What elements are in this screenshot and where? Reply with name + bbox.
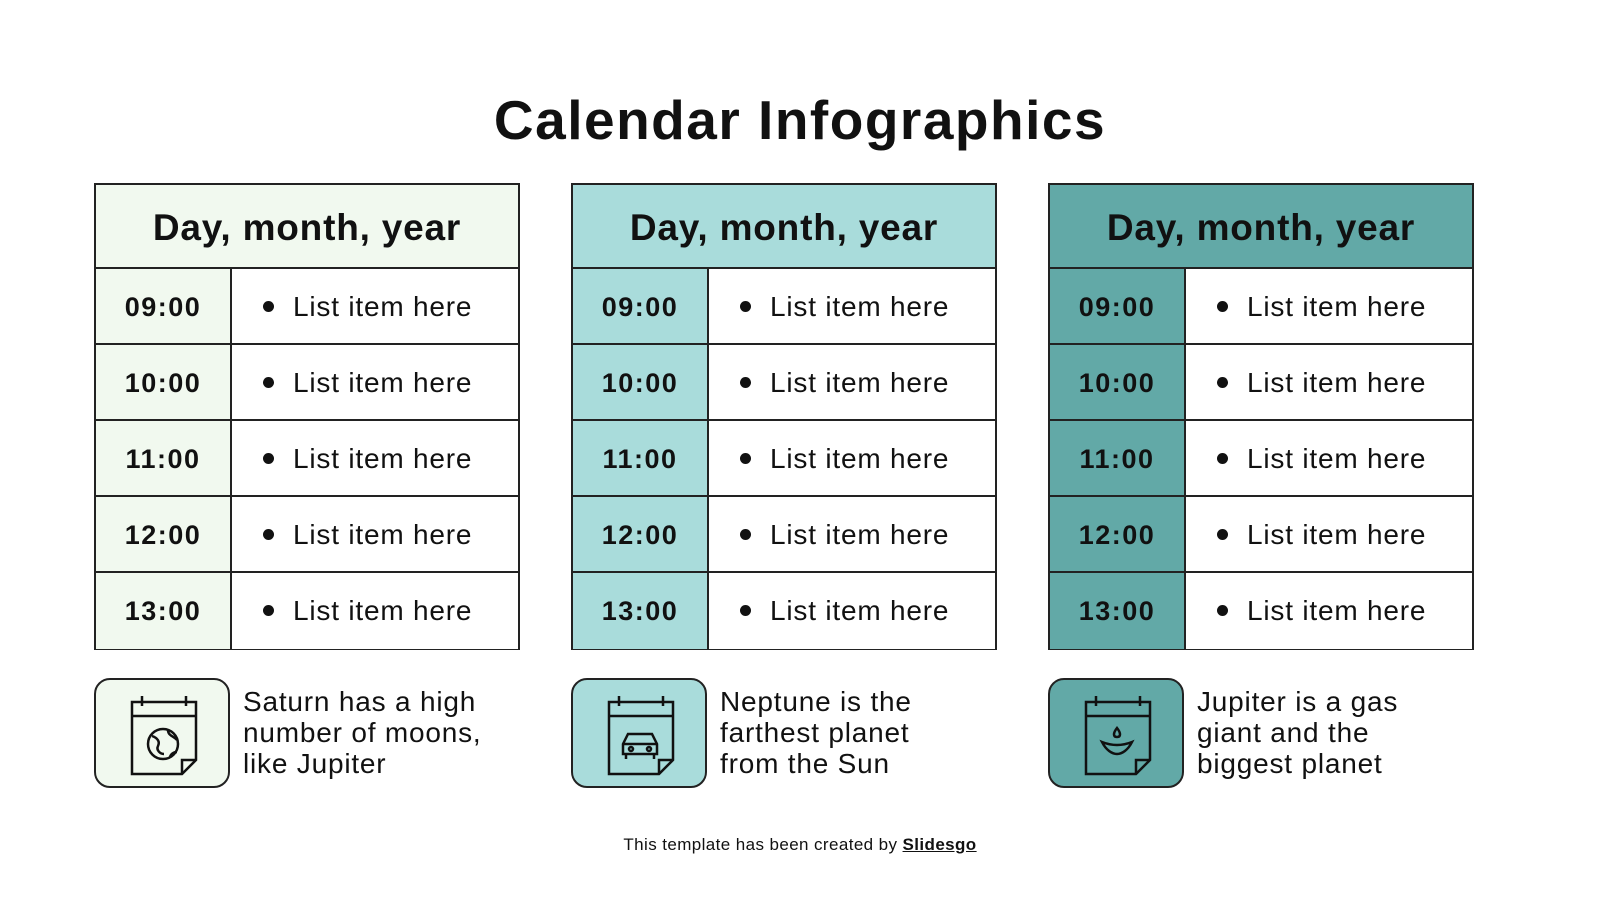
table header 2: Day, month, year [630,207,938,248]
text 3 [1197,686,1398,779]
panel: table 2: List item here [770,443,949,474]
panel: table 1: 09:00 [125,292,201,322]
panel: table 1: 13:00 [125,596,201,626]
panel: table 3: List item here [1247,367,1426,398]
text 1: like Jupiter [243,748,386,779]
panel: table 1: 12:00 [125,520,201,550]
icon: calendar globe [94,678,230,788]
panel: table 2: 12:00 [602,520,678,550]
panel: table 3: List item here [1247,443,1426,474]
text 3: biggest planet [1197,748,1383,779]
panel: table 2: 10:00 [602,368,678,398]
text 1 [243,686,481,779]
panel: table 1: List item here [293,595,472,626]
panel: table 3: 09:00 [1079,292,1155,322]
text 1: Saturn has a high [243,686,476,717]
panel: table 1: List item here [293,291,472,322]
footer credit: This template has been created by Slidesgo [623,835,977,854]
icon: calendar lamp [1048,678,1184,788]
panel: table 1: 10:00 [125,368,201,398]
table header 1 [96,185,518,269]
panel: table 2: List item here [770,595,949,626]
panel: table 2: List item here [770,519,949,550]
panel: table 2: 11:00 [602,444,678,474]
panel: table 2: List item here [770,291,949,322]
panel: table 2: 13:00 [602,596,678,626]
table header 2 [573,185,995,269]
panel: table 1: List item here [293,367,472,398]
panel: table 3: List item here [1247,291,1426,322]
text 1: number of moons, [243,717,481,748]
panel: table 3: 13:00 [1079,596,1155,626]
text 2 [720,686,912,779]
table header 3 [1050,185,1472,269]
panel: table 3: 12:00 [1079,520,1155,550]
panel: table 3: List item here [1247,595,1426,626]
table header 1: Day, month, year [153,207,461,248]
panel: table 2: List item here [770,367,949,398]
panel: table 1: 11:00 [125,444,201,474]
panel: table 2: 09:00 [602,292,678,322]
text 3: Jupiter is a gas [1197,686,1398,717]
panel: table 2 [571,183,997,650]
panel: table 3 [1048,183,1474,650]
title: Calendar Infographics [494,89,1106,151]
text 2: Neptune is the [720,686,912,717]
panel: table 3: 10:00 [1079,368,1155,398]
panel: table 1: List item here [293,443,472,474]
text 2: from the Sun [720,748,890,779]
text 3: giant and the [1197,717,1369,748]
text 2: farthest planet [720,717,909,748]
icon: calendar car [571,678,707,788]
panel: table 1 [94,183,520,650]
panel: table 3: 11:00 [1079,444,1155,474]
table header 3: Day, month, year [1107,207,1415,248]
panel: table 1: List item here [293,519,472,550]
panel: table 3: List item here [1247,519,1426,550]
